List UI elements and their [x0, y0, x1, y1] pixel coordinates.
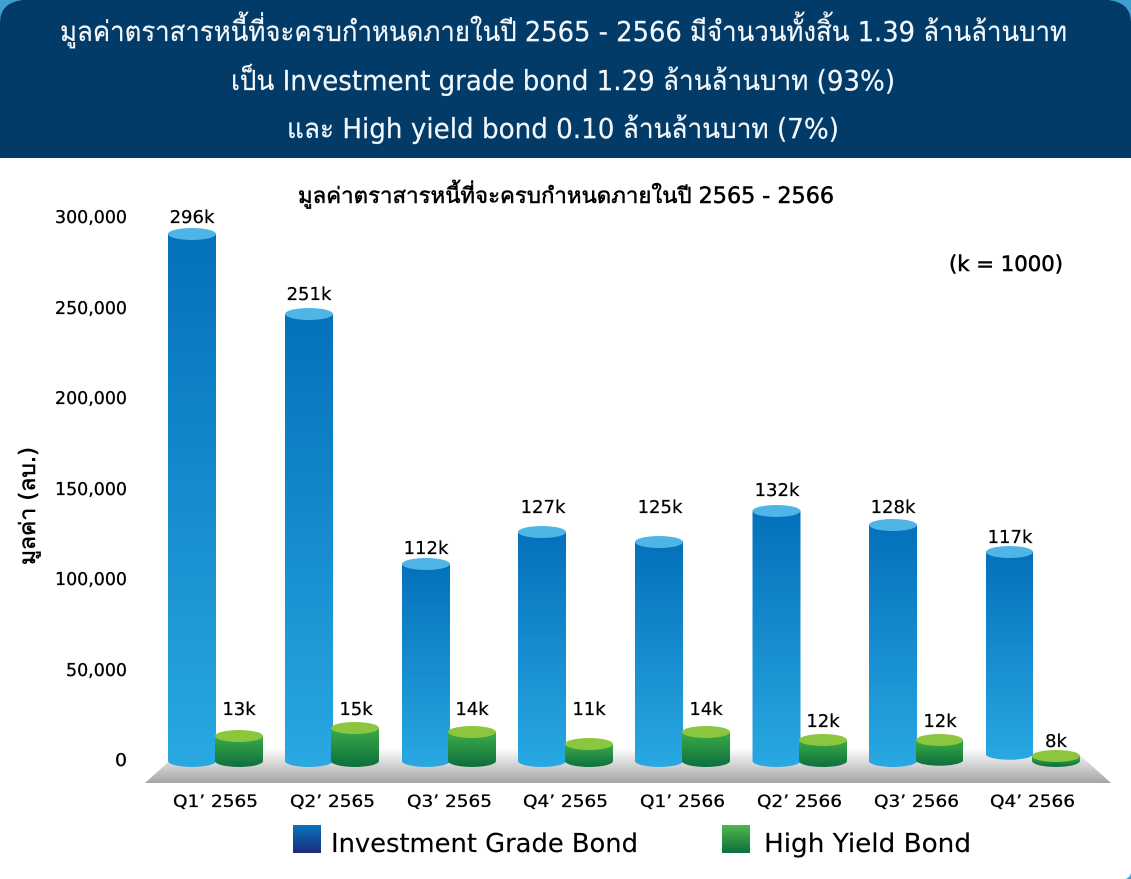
- x axis labels: Q4’ 2565: [523, 792, 608, 812]
- legend: high yield bond: High Yield Bond: [764, 829, 971, 859]
- headline line 1: มูลค่าตราสารหนี้ที่จะครบกำหนดภายในปี 2565 - 2566 มีจำนวนทั้งสิ้น 1.39 ล้านล้านบาท: [60, 11, 1067, 49]
- legend: investment grade bond: Investment Grade Bond: [331, 829, 638, 859]
- floor: [145, 748, 1111, 783]
- value labels: high yield: 12k: [806, 711, 840, 732]
- value labels: investment grade: [170, 207, 1033, 559]
- y axis labels: 50,000: [66, 660, 127, 681]
- value labels: investment grade: 117k: [988, 527, 1033, 548]
- value labels: high yield: 11k: [572, 699, 606, 720]
- y axis labels: 250,000: [55, 298, 127, 319]
- value labels: high yield: 14k: [689, 699, 723, 720]
- x axis labels: Q2’ 2566: [757, 792, 842, 812]
- header banner: [0, 0, 1131, 158]
- headline line 3: และ High yield bond 0.10 ล้านล้านบาท (7%): [287, 112, 839, 145]
- value labels: investment grade: 296k: [170, 207, 215, 228]
- x axis labels: Q1’ 2565: [173, 792, 258, 812]
- x axis labels: [173, 792, 1075, 812]
- x axis labels: Q3’ 2565: [407, 792, 492, 812]
- value labels: high yield: 12k: [923, 711, 957, 732]
- y axis labels: [55, 207, 127, 771]
- x axis labels: Q3’ 2566: [874, 792, 959, 812]
- value labels: investment grade: 127k: [521, 497, 566, 518]
- value labels: high yield: 8k: [1045, 731, 1068, 752]
- value labels: high yield: 15k: [339, 699, 373, 720]
- x axis labels: Q2’ 2565: [290, 792, 375, 812]
- value labels: investment grade: 128k: [871, 497, 916, 518]
- value labels: investment grade: 125k: [638, 497, 683, 518]
- y axis labels: 150,000: [55, 479, 127, 500]
- y axis labels: 300,000: [55, 207, 127, 228]
- y axis labels: 200,000: [55, 388, 127, 409]
- y axis title: มูลค่า (ลบ.): [16, 447, 41, 565]
- chart title: มูลค่าตราสารหนี้ที่จะครบกำหนดภายในปี 2565 - 2566: [298, 180, 834, 209]
- x axis labels: Q4’ 2566: [990, 792, 1075, 812]
- value labels: investment grade: 251k: [287, 284, 332, 305]
- bars: high yield bond: [215, 722, 1080, 767]
- value labels: high yield: 14k: [455, 699, 489, 720]
- x axis labels: Q1’ 2566: [640, 792, 725, 812]
- value labels: investment grade: 112k: [404, 538, 449, 559]
- bars: investment grade bond: [168, 228, 1033, 767]
- unit note: (k = 1000): [949, 252, 1063, 276]
- value labels: investment grade: 132k: [755, 480, 800, 501]
- y axis labels: 100,000: [55, 569, 127, 590]
- y axis labels: 0: [115, 750, 127, 771]
- value labels: high yield: [222, 699, 1068, 752]
- headline line 2: เป็น Investment grade bond 1.29 ล้านล้านบาท (93%): [231, 63, 895, 97]
- value labels: high yield: 13k: [222, 699, 256, 720]
